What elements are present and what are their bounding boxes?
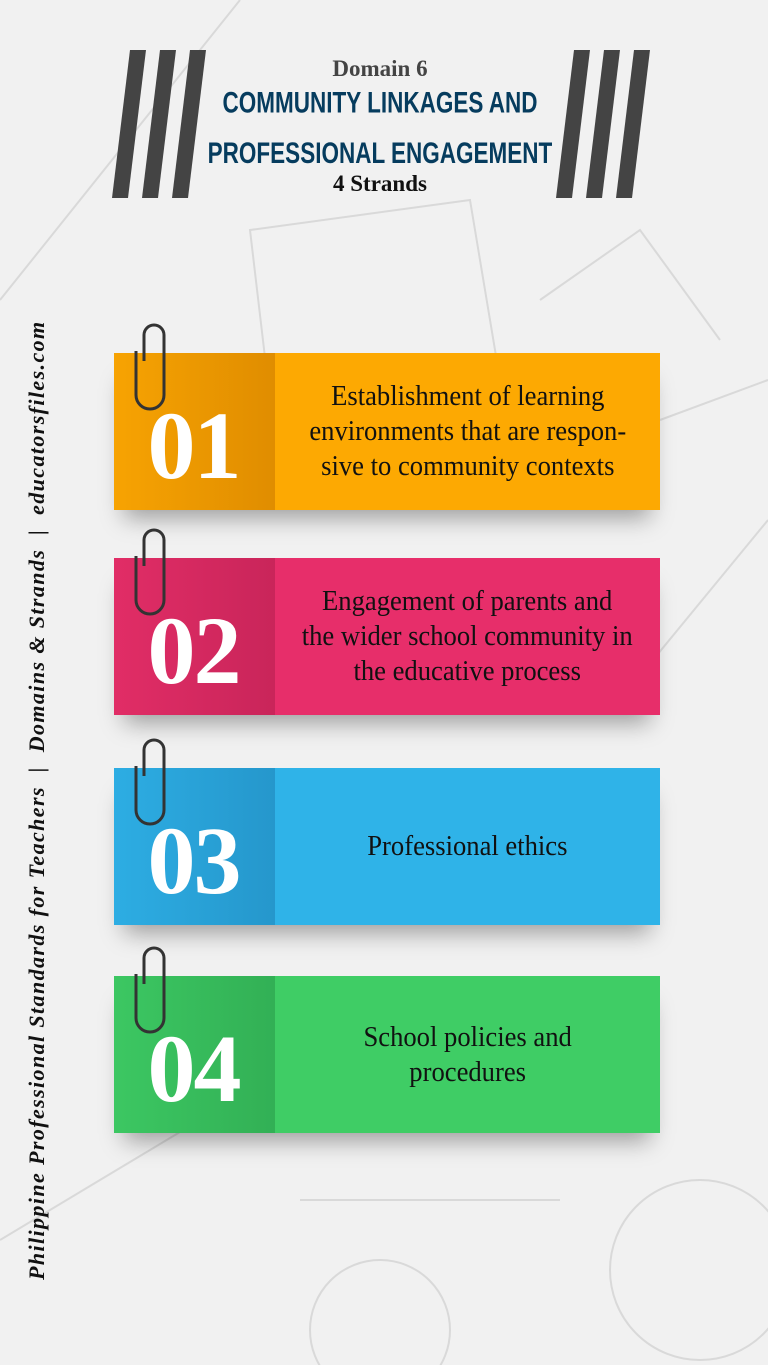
title block: Domain 6 (332, 56, 428, 81)
card 2: the educative process (354, 656, 581, 687)
decorative bars right (556, 50, 650, 198)
card 3: Professional ethics (367, 831, 568, 862)
card 3: 03 (148, 807, 240, 914)
title block: 4 Strands (333, 171, 427, 196)
decorative bars left (112, 50, 206, 198)
card 2 (114, 558, 660, 715)
title block (208, 56, 552, 196)
card 3 (114, 768, 660, 925)
card 2: Engagement of parents and (322, 586, 613, 617)
card 1: 01 (148, 392, 240, 499)
card 1: environments that are respon- (309, 416, 626, 447)
title block: COMMUNITY LINKAGES AND (222, 86, 538, 120)
title block: PROFESSIONAL ENGAGEMENT (208, 136, 552, 170)
card 2: 02 (148, 597, 240, 704)
card 4: School policies and (363, 1022, 572, 1052)
card 4: procedures (409, 1056, 526, 1088)
card 1: Establishment of learning (331, 381, 604, 412)
vertical side text: Philippine Professional Standards for Teachers | Domains & Strands | educatorsfiles.com (24, 320, 49, 1280)
card 1 (114, 353, 660, 510)
card 4: 04 (148, 1015, 240, 1122)
card 2: the wider school community in (302, 621, 633, 652)
card 4 (114, 976, 660, 1133)
card 1: sive to community contexts (321, 451, 614, 482)
